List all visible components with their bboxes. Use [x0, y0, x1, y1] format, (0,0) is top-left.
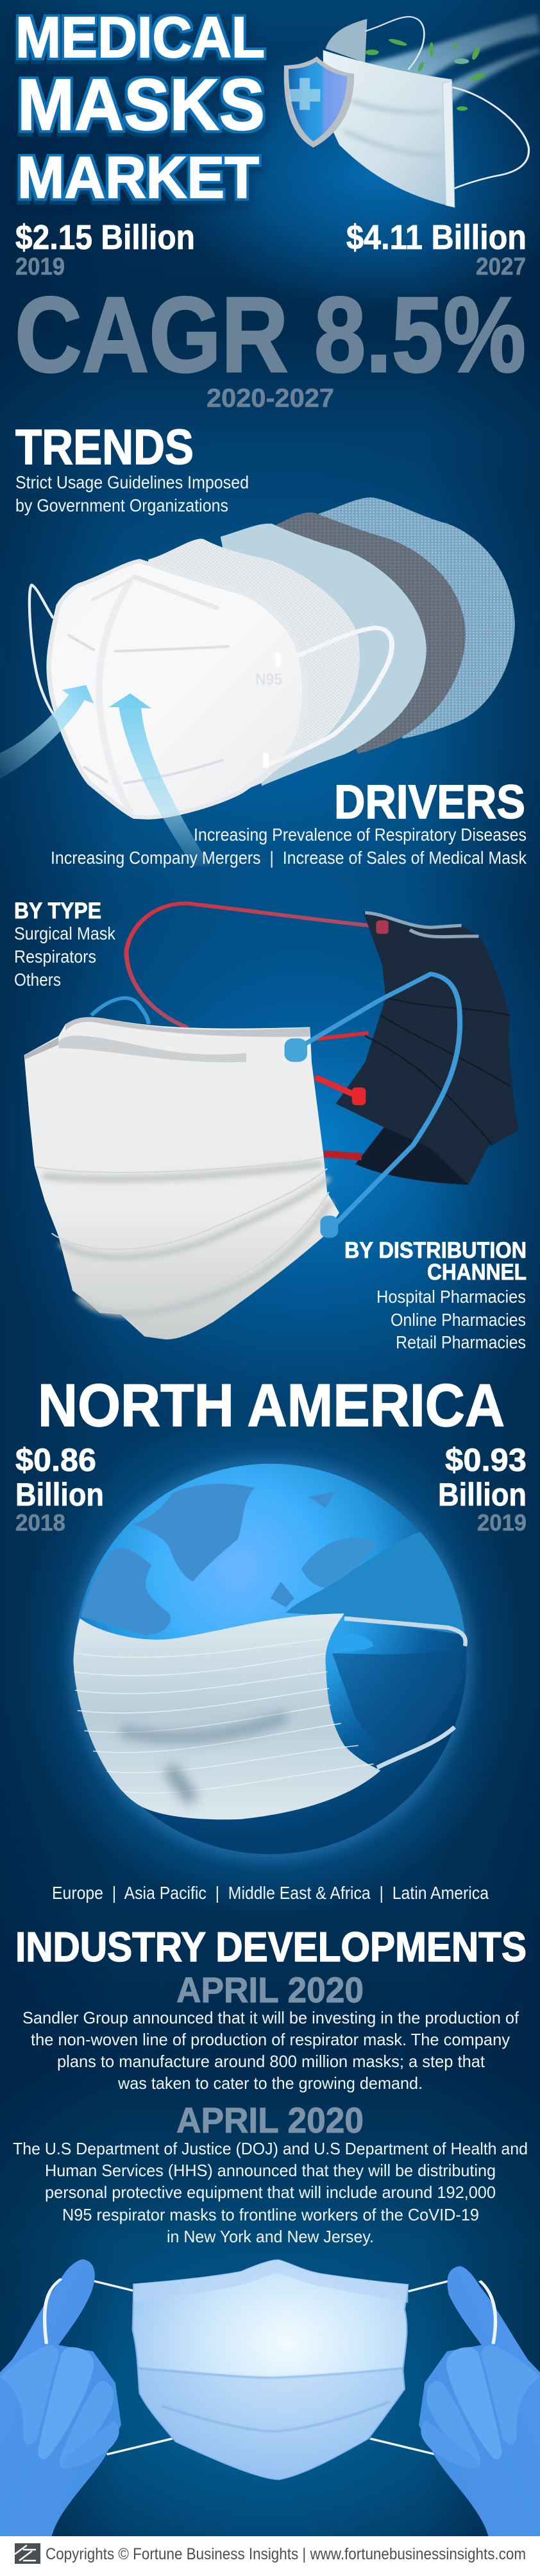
stat: 2019 north america: Billion [438, 1477, 527, 1513]
right glove [419, 2266, 540, 2536]
navy nose wires [365, 913, 478, 937]
by type segment [14, 898, 116, 990]
trends heading and text [15, 420, 249, 515]
development 2: N95 respirator masks to frontline workers of the CoVID-19 [62, 2205, 479, 2224]
development 2: APRIL 2020 [176, 2100, 364, 2140]
layer: white mesh [148, 538, 360, 812]
stat: 2019 north america: 2019 [477, 1509, 527, 1536]
cloth masks illustration [24, 904, 518, 1339]
stat: 2019 value: $2.15 Billion [15, 218, 195, 257]
seam [443, 81, 455, 207]
north america heading: NORTH AMERICA [38, 1371, 505, 1439]
blue tabs [285, 1038, 307, 1062]
footer logo [15, 2543, 40, 2564]
red ear loop [126, 904, 382, 1027]
white mask [24, 1017, 339, 1339]
stat: 2018 north america: 2018 [15, 1509, 65, 1536]
creases [69, 577, 228, 812]
by distribution channel segment: BY DISTRIBUTION [344, 1238, 527, 1263]
africa and middle east [332, 1650, 462, 1767]
development 2 [13, 2100, 528, 2246]
development 1: Sandler Group announced that it will be investing in the production of [22, 2008, 519, 2027]
airflow arrow 2 [109, 693, 210, 866]
stat: 2018 north america: Billion [15, 1477, 104, 1513]
stat: 2018 north america [15, 1442, 104, 1536]
wind streaks [365, 14, 540, 125]
mask straps [344, 1619, 466, 1767]
trends heading and text: TRENDS [15, 420, 194, 475]
by type segment: Surgical Mask [14, 923, 116, 943]
blue surgical mask [133, 2260, 408, 2480]
globe [74, 1464, 467, 1854]
stat: 2019 value [15, 218, 195, 280]
shield cross [289, 78, 320, 110]
title: MEDICAL [15, 6, 265, 70]
navy mask inner shadow [355, 1128, 468, 1185]
stat: 2027 value: 2027 [476, 253, 526, 280]
by distribution channel segment: CHANNEL [427, 1260, 527, 1285]
navy pleats [365, 997, 510, 1145]
drivers heading and text [51, 775, 527, 868]
development 2: personal protective equipment that will include around 192,000 [45, 2183, 496, 2202]
stat: 2019 value: 2019 [15, 253, 65, 280]
other regions: Europe | Asia Pacific | Middle East & Africa | Latin America [52, 1883, 489, 1903]
layer: pale filter [221, 524, 426, 786]
left ear band [30, 585, 57, 719]
development 2: in New York and New Jersey. [167, 2227, 374, 2246]
development 2: The U.S Department of Justice (DOJ) and U.S Department of Health and [13, 2139, 528, 2158]
development 2: Human Services (HHS) announced that they will be distributing [45, 2161, 496, 2180]
by type segment: Respirators [14, 947, 96, 966]
title [15, 6, 265, 210]
development 1: was taken to cater to the growing demand. [117, 2074, 423, 2093]
globe wearing mask [67, 1456, 473, 1862]
by distribution channel segment: Hospital Pharmacies [376, 1287, 526, 1307]
mediterranean [334, 1634, 374, 1653]
CAGR: 2020-2027 [207, 383, 334, 413]
mask folds [138, 2368, 403, 2431]
mask lower shade [139, 2369, 405, 2480]
red tabs [352, 1088, 366, 1105]
by distribution channel segment: Online Pharmacies [391, 1310, 526, 1330]
title: MASKS [17, 64, 265, 145]
mask fold shadows [121, 1716, 286, 1801]
mask stripes [74, 1638, 374, 1793]
white mask pleats [36, 1156, 329, 1308]
N95 imprint: N95 [255, 671, 282, 689]
navy mask [336, 912, 518, 1185]
pleat shadows [344, 100, 443, 156]
globe glow [67, 1456, 473, 1862]
stat: 2018 north america: $0.86 [15, 1442, 96, 1478]
left glove [0, 2259, 121, 2536]
drivers heading and text: DRIVERS [334, 775, 525, 829]
upper ear loop [365, 17, 424, 69]
gloved hands holding blue mask [0, 2259, 540, 2536]
leaves [365, 38, 486, 111]
back blue loop [91, 998, 149, 1024]
stat: 2027 value [346, 218, 527, 280]
by type segment: Others [14, 970, 61, 990]
development 1: plans to manufacture around 800 million masks; a step that [57, 2052, 485, 2071]
white mask nose wires [25, 1017, 310, 1062]
respirator body [49, 561, 305, 818]
stat: 2019 north america: $0.93 [445, 1442, 527, 1478]
shield [284, 56, 354, 148]
white mask pleat shading [43, 1164, 331, 1314]
blue ear loop [296, 974, 460, 1229]
by distribution channel segment [344, 1238, 527, 1352]
red straps [312, 1033, 369, 1156]
by distribution channel segment: Retail Pharmacies [396, 1332, 526, 1352]
globe mask [73, 1613, 380, 1819]
airflow arrow 1 [0, 685, 94, 778]
by type segment: BY TYPE [14, 898, 101, 923]
right ear band [265, 628, 392, 766]
title: MARKET [17, 145, 259, 210]
trends heading and text: Strict Usage Guidelines Imposed [15, 472, 249, 492]
layer: dotted back [319, 497, 515, 739]
development 1 [22, 1970, 519, 2093]
development 1: APRIL 2020 [176, 1970, 364, 2010]
mask front [323, 50, 455, 207]
right ear loop [450, 87, 529, 190]
trends heading and text: by Government Organizations [15, 495, 228, 515]
footer [0, 2536, 540, 2576]
ear straps [93, 2281, 450, 2455]
development 1: the non-woven line of production of respirator mask. The company [31, 2030, 510, 2049]
N95 respirator exploded layers [0, 497, 515, 866]
layer: grey carbon [276, 513, 466, 754]
hero illustration: surgical mask with shield [284, 14, 540, 207]
mask top band [133, 2260, 408, 2303]
mask inner side [325, 19, 367, 63]
stat: 2019 north america [438, 1442, 527, 1536]
continents [81, 1484, 465, 1635]
